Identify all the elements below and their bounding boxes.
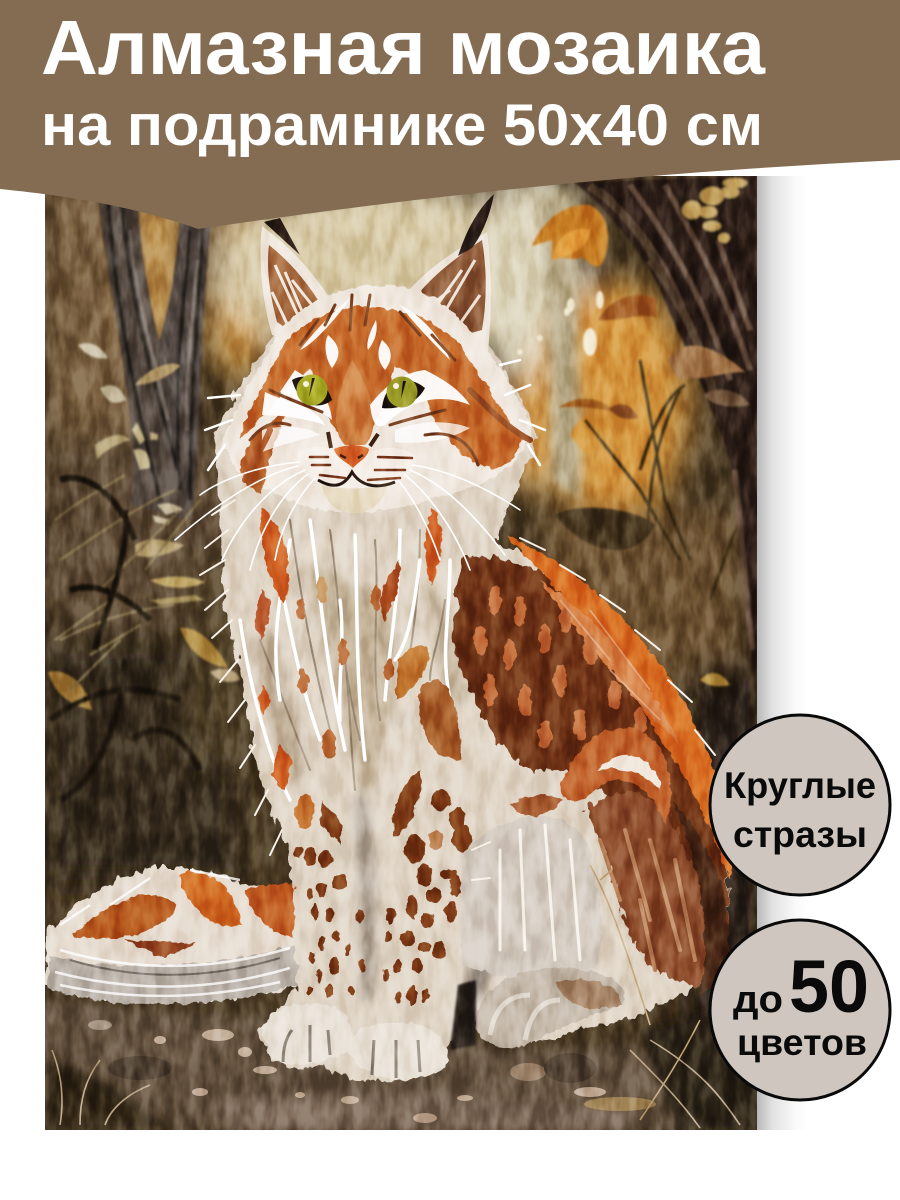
tail — [46, 867, 300, 1004]
subtitle: на подрамнике 50х40 см — [41, 93, 763, 158]
chest shading — [250, 560, 494, 1000]
header banner — [0, 0, 900, 229]
tree trunks left — [97, 190, 214, 520]
nose — [334, 445, 369, 468]
badge: up to 50 colours: до — [733, 979, 783, 1021]
forest background — [45, 170, 760, 1130]
pale leaves on tree — [682, 178, 747, 243]
eyes — [292, 374, 425, 408]
body silhouette — [215, 290, 728, 1081]
painting: lynx in autumn forest — [45, 170, 760, 1130]
whiskers — [175, 462, 520, 570]
ear tuft — [458, 194, 494, 256]
mouth — [318, 472, 395, 486]
canvas shadow — [757, 176, 809, 1130]
badge: round rhinestones — [710, 715, 890, 895]
pale sapling right — [537, 190, 581, 500]
cheek fur tips — [205, 360, 545, 470]
badge: round rhinestones: Круглые — [724, 765, 876, 806]
large dark tree right — [575, 176, 757, 700]
hip arc — [560, 727, 671, 825]
autumn leaves right — [532, 205, 750, 686]
badge: up to 50 colours: 50 — [789, 945, 869, 1028]
left foliage — [48, 343, 240, 800]
badge: up to 50 colours — [710, 920, 890, 1100]
chin — [322, 483, 388, 513]
foreground grass over flank — [590, 865, 700, 1120]
head — [175, 285, 545, 570]
ears — [260, 194, 494, 352]
belly — [462, 816, 602, 980]
hind paw — [450, 968, 625, 1050]
badge: up to 50 colours: цветов — [737, 1022, 867, 1063]
lynx — [46, 194, 732, 1081]
feather marks — [474, 585, 646, 749]
pebbles — [88, 1020, 656, 1123]
hip and lower flank — [462, 727, 729, 995]
badge: round rhinestones: стразы — [733, 814, 867, 855]
chest fur streaks — [200, 500, 715, 880]
paint texture — [45, 176, 757, 1130]
edge hair — [200, 500, 715, 880]
front paws — [262, 1004, 447, 1080]
muzzle — [298, 447, 416, 488]
bright spots — [517, 291, 604, 356]
rust back — [452, 535, 732, 926]
ground — [45, 1000, 760, 1130]
forehead stripes — [262, 298, 470, 452]
orange rim — [505, 535, 732, 880]
chest and leg spots — [254, 508, 472, 1005]
title: Алмазная мозаика — [41, 5, 766, 91]
